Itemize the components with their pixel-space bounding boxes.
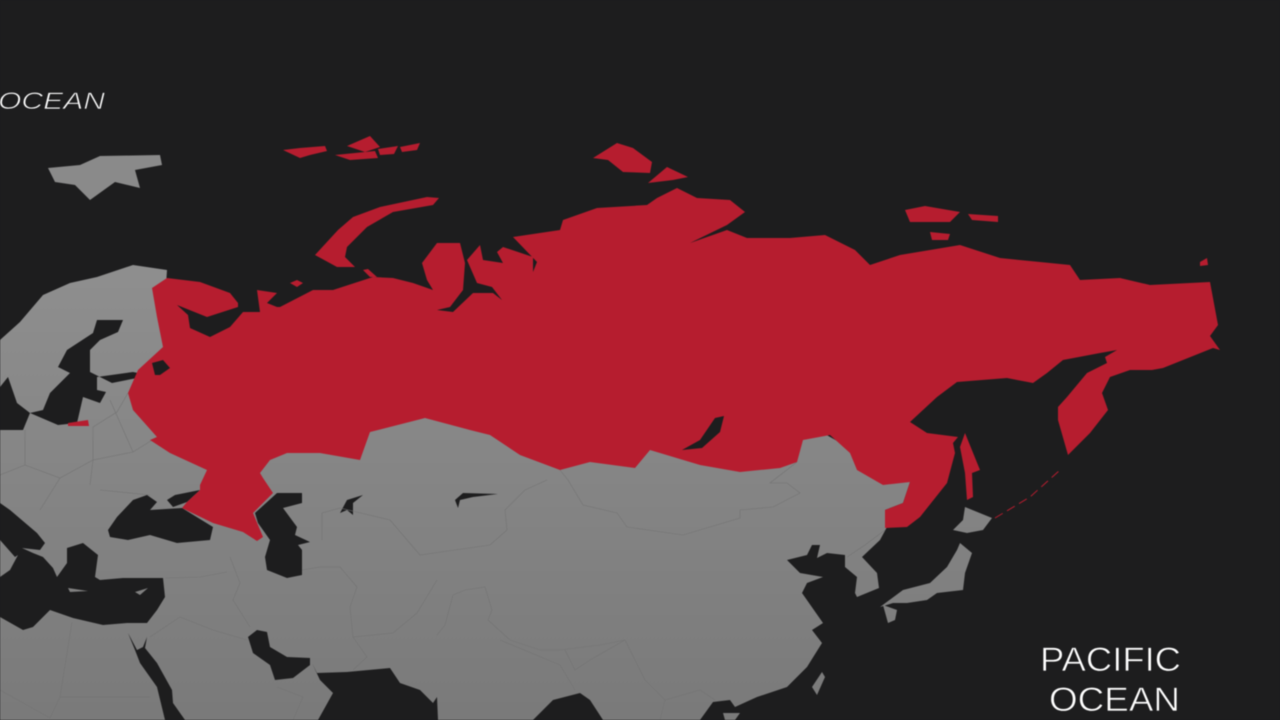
Hokkaido xyxy=(953,507,992,533)
Hainan, Cyprus and Crete xyxy=(68,588,740,720)
country borders xyxy=(0,393,885,720)
Arabian Sea xyxy=(312,663,438,720)
label: Atlantic Ocean fragment: OCEAN xyxy=(0,88,106,115)
Lake Ladoga cutout xyxy=(152,360,170,375)
Novaya Zemlya xyxy=(315,197,439,267)
Severnaya Zemlya xyxy=(593,143,688,183)
Sakhalin xyxy=(960,433,980,500)
Svalbard xyxy=(48,155,162,200)
Kolguev Island xyxy=(290,280,303,287)
Aral Sea xyxy=(340,495,363,515)
Lake Balkhash xyxy=(455,493,498,508)
Honshu xyxy=(880,543,972,607)
Kaliningrad xyxy=(68,420,89,426)
Caspian Sea xyxy=(255,493,310,578)
Sea of Azov xyxy=(167,490,200,507)
Bay of Bengal xyxy=(533,693,603,720)
New Siberian Islands xyxy=(905,206,998,240)
grey landmass: Europe and Asia xyxy=(0,265,992,720)
label: Pacific Ocean xyxy=(1040,641,1181,719)
Russia in red xyxy=(68,136,1220,541)
Persian Gulf xyxy=(248,630,310,680)
Vaygach Island xyxy=(363,269,377,277)
Franz Josef Land xyxy=(283,136,420,160)
Red Sea xyxy=(128,633,185,720)
Black Sea xyxy=(108,495,213,543)
seas and lakes xyxy=(0,320,603,720)
Kyushu xyxy=(883,605,897,623)
Wrangel Island xyxy=(1200,258,1208,266)
Baltic Sea xyxy=(0,320,148,430)
label: Pacific Ocean: PACIFIC xyxy=(1040,641,1181,679)
Taiwan xyxy=(812,672,825,695)
label: Pacific Ocean: OCEAN xyxy=(1049,681,1180,719)
Lake Baikal cutout xyxy=(682,416,724,450)
Mediterranean Sea xyxy=(0,503,165,630)
Kuril Islands xyxy=(995,470,1060,518)
mainland Russia xyxy=(128,188,1220,541)
